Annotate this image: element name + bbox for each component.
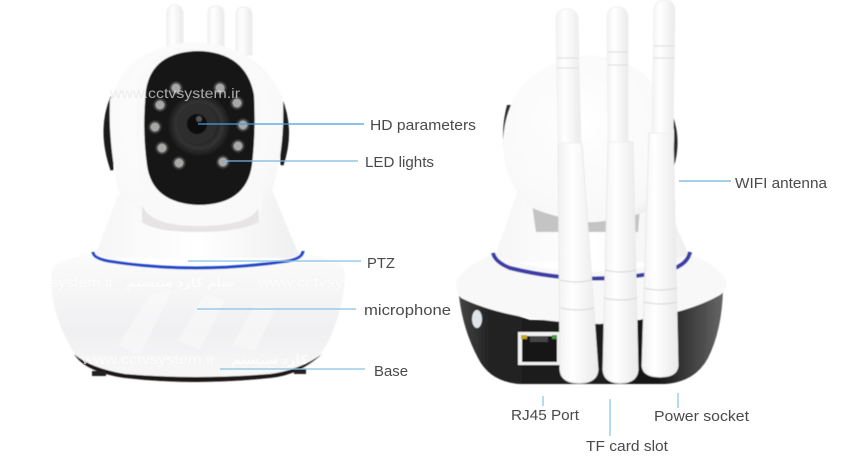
rear antenna 3 <box>642 0 678 377</box>
line: Base <box>220 368 365 370</box>
rear neck <box>492 190 692 262</box>
label: microphone: microphone <box>364 302 451 319</box>
front antennas <box>167 5 252 55</box>
watermarks: www.cctvsy <box>257 274 343 290</box>
line: microphone <box>197 308 356 310</box>
watermarks: www.cctvsystem.ir <box>81 351 215 367</box>
watermarks: www.cctvsystem.ir <box>109 85 240 101</box>
watermarks: سام کارد سیستم <box>126 275 234 291</box>
front head <box>110 42 283 230</box>
rear sticker <box>472 310 482 328</box>
line: HD parameters <box>198 123 364 125</box>
front blue ring <box>93 251 303 268</box>
watermarks: system.ir <box>50 274 114 290</box>
front black face <box>144 51 255 205</box>
label: PTZ: PTZ <box>367 255 395 272</box>
front base <box>51 254 345 382</box>
rear grey recess <box>532 204 640 232</box>
rear dark base <box>459 290 723 384</box>
labels <box>364 117 828 455</box>
line: WIFI antenna <box>679 180 731 182</box>
label: HD parameters: HD parameters <box>370 117 476 134</box>
front head side dark <box>105 97 288 170</box>
label: RJ45 Port: RJ45 Port <box>511 407 580 424</box>
rear antenna 2 <box>603 7 638 383</box>
rear RJ45 port <box>518 332 561 365</box>
label: Base: Base <box>374 363 408 380</box>
line: RJ45 Port <box>542 396 544 406</box>
front base shine <box>118 290 275 355</box>
line: LED lights <box>224 160 358 162</box>
watermarks <box>50 85 343 367</box>
line: TF card slot <box>609 399 611 436</box>
label: Power socket: Power socket <box>654 408 750 425</box>
callout lines <box>188 124 731 436</box>
front base black foot <box>74 354 322 382</box>
rear camera <box>456 0 727 384</box>
label: LED lights: LED lights <box>365 154 434 171</box>
front neck <box>92 190 303 258</box>
rear head side dark <box>503 105 678 172</box>
label: WIFI antenna: WIFI antenna <box>735 175 828 192</box>
front lens <box>168 94 230 156</box>
label: TF card slot: TF card slot <box>586 438 669 455</box>
front LED lights <box>150 82 248 168</box>
line: PTZ <box>188 260 361 262</box>
rear antenna 1 <box>556 9 598 383</box>
watermarks: کارد سیستم <box>231 352 308 367</box>
front visor <box>136 46 262 228</box>
rear head <box>503 55 674 221</box>
line: Power socket <box>677 393 679 408</box>
rear blue ring <box>493 252 690 279</box>
front camera <box>51 5 345 382</box>
rear white base top <box>456 254 727 324</box>
